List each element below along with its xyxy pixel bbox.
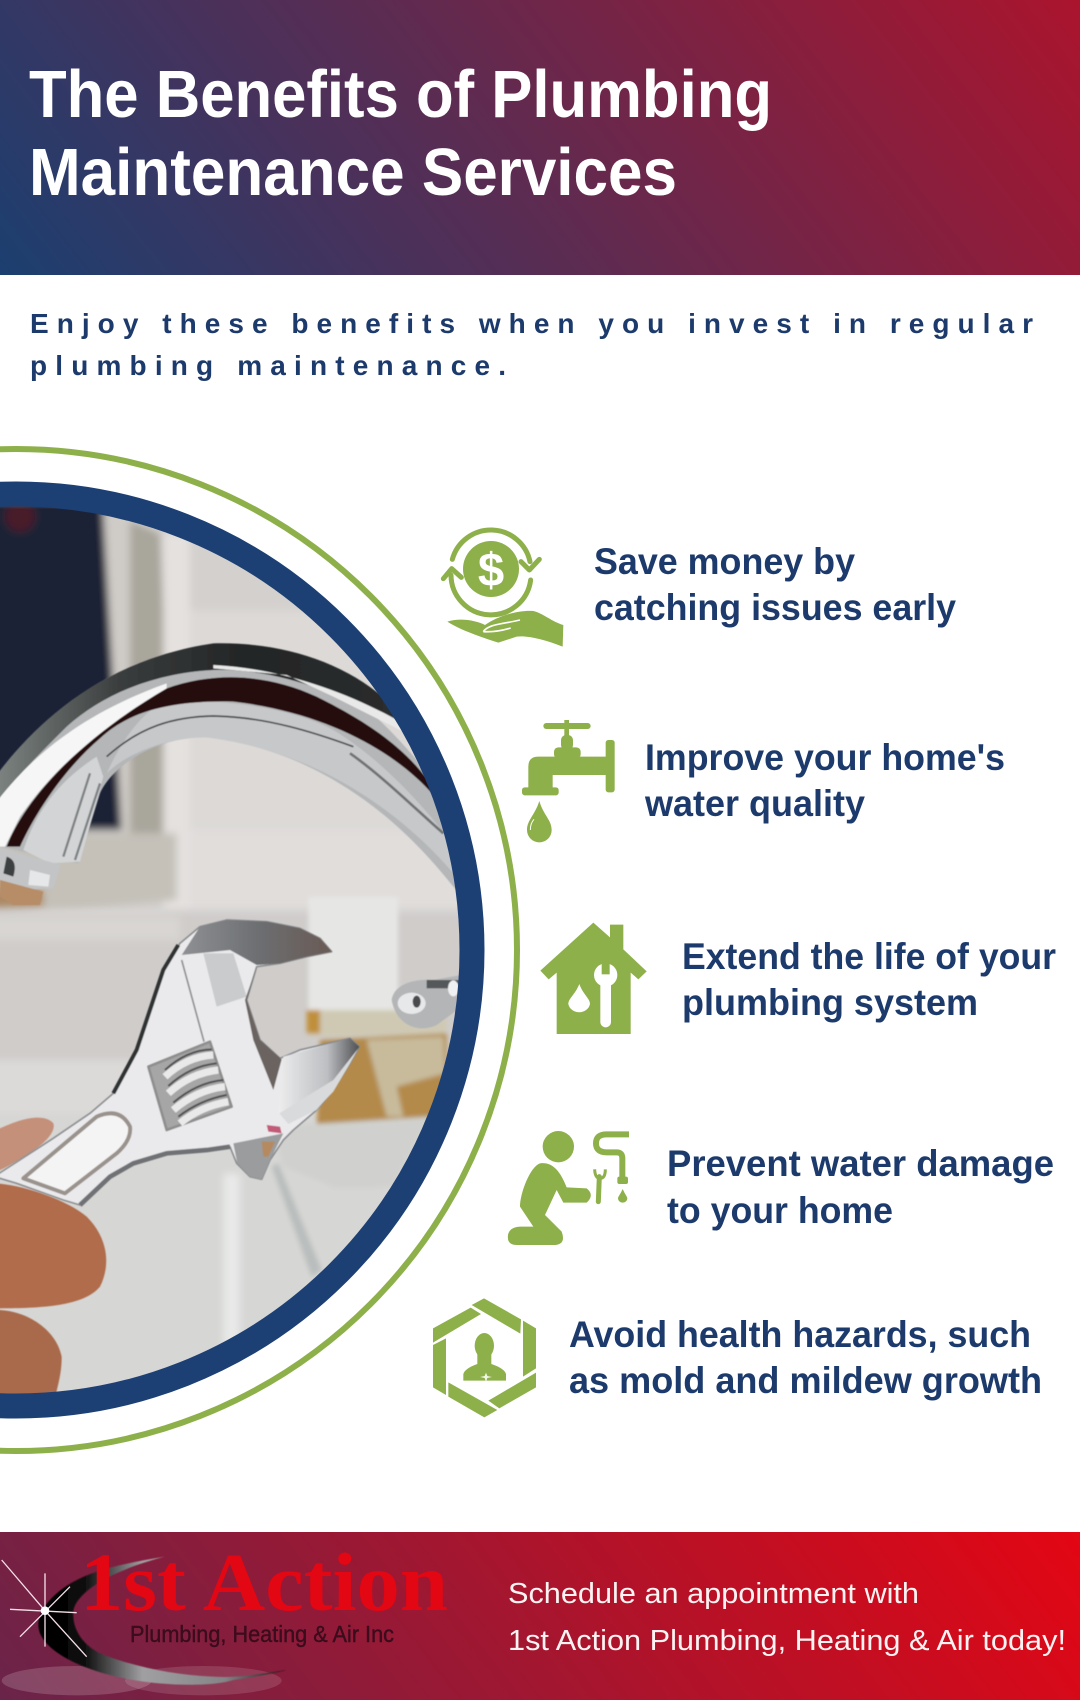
handle slot xyxy=(23,1113,130,1193)
benefit 4: prevent damage xyxy=(508,1131,1054,1245)
text: extend life: plumbing system xyxy=(682,982,978,1023)
call to action: 1st Action Plumbing, Heating & Air today! xyxy=(508,1625,1066,1657)
text: avoid hazards xyxy=(569,1314,1042,1401)
benefit 5: avoid hazards xyxy=(433,1298,1042,1417)
wrench body xyxy=(0,920,359,1205)
benefit 1: save money xyxy=(443,530,956,647)
knurl xyxy=(148,1042,232,1130)
text: water quality: Improve your home's xyxy=(645,737,1005,778)
text: save money: Save money by xyxy=(594,541,855,582)
title: The Benefits of Plumbing xyxy=(29,57,772,132)
intro text: Enjoy these benefits when you invest in regular xyxy=(30,308,1033,339)
icon: dripping faucet xyxy=(522,720,615,842)
icon: plumber at pipe xyxy=(508,1131,629,1245)
text: avoid hazards: Avoid health hazards, such xyxy=(569,1314,1031,1355)
text: prevent damage: to your home xyxy=(667,1190,893,1231)
call to action: Schedule an appointment with xyxy=(508,1578,919,1610)
thumb xyxy=(0,1183,106,1308)
title: Maintenance Services xyxy=(29,135,677,210)
icon: hexagon with person xyxy=(433,1298,536,1417)
logo: Plumbing, Heating & Air Inc xyxy=(130,1621,394,1647)
icon: money in hand: $ xyxy=(478,544,504,597)
call to action xyxy=(508,1578,1066,1657)
intro text xyxy=(30,308,1033,381)
icon: money in hand xyxy=(443,530,563,647)
text: avoid hazards: as mold and mildew growth xyxy=(569,1360,1042,1401)
logo: 1st Action xyxy=(80,1536,448,1628)
text: water quality xyxy=(644,737,1005,824)
text: extend life: Extend the life of your xyxy=(682,936,1056,977)
footer band xyxy=(0,1532,1080,1700)
photo background xyxy=(0,506,460,1392)
intro text: plumbing maintenance. xyxy=(30,350,506,381)
upper finger xyxy=(0,1118,54,1172)
benefit 3: extend life xyxy=(540,923,1056,1034)
faucet spout xyxy=(0,643,473,913)
text: prevent damage xyxy=(667,1143,1054,1231)
icon: house with drop and wrench xyxy=(540,923,647,1034)
text: save money: catching issues early xyxy=(594,587,956,628)
adjuster screw xyxy=(233,1133,283,1179)
text: water quality: water quality xyxy=(644,783,865,824)
ring: blue xyxy=(0,494,472,1406)
header band xyxy=(0,0,1080,275)
ring: green xyxy=(0,449,517,1451)
title xyxy=(29,57,772,210)
text: extend life xyxy=(682,936,1056,1023)
benefit 2: water quality xyxy=(522,720,1005,842)
nozzle xyxy=(0,847,61,889)
photo: wrench and faucet in circle xyxy=(0,506,460,1394)
logo xyxy=(2,1536,448,1695)
text: prevent damage: Prevent water damage xyxy=(667,1143,1054,1184)
faucet handle xyxy=(392,975,462,1028)
text: save money xyxy=(594,541,956,628)
hand and wrench xyxy=(0,920,359,1398)
lower finger xyxy=(0,1310,62,1398)
